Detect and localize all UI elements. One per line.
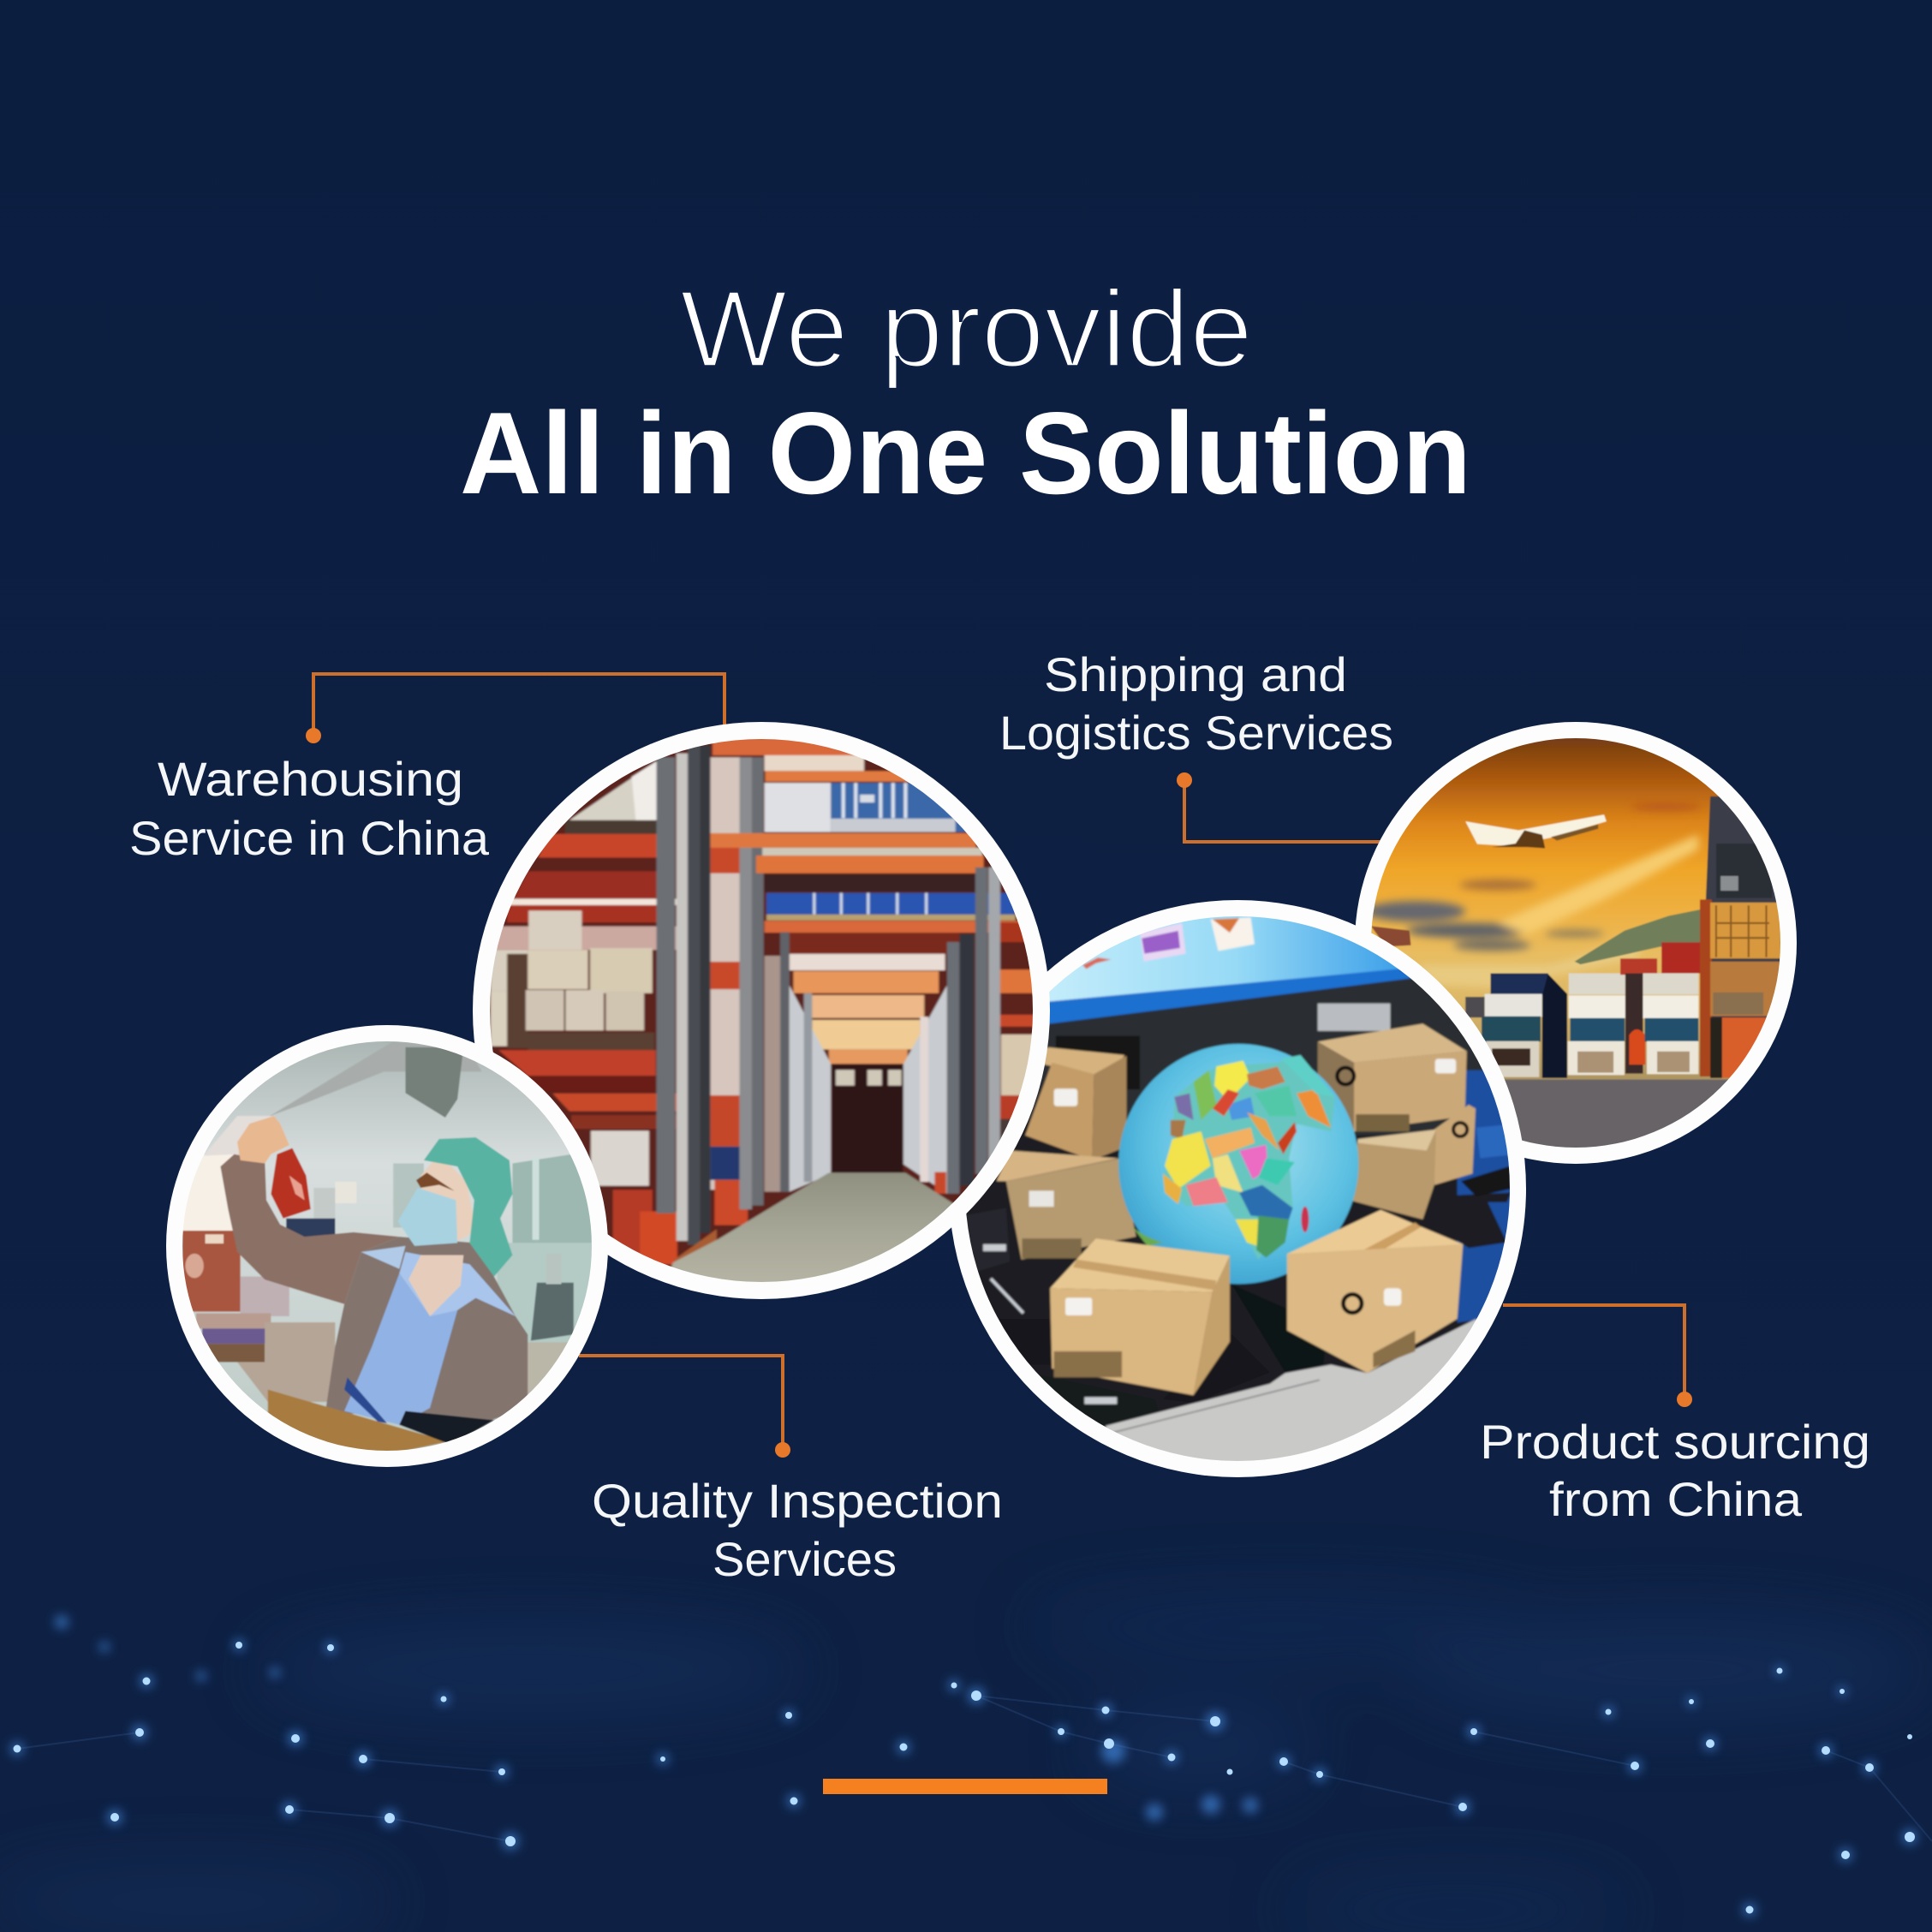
box front left bbox=[1050, 1238, 1230, 1395]
orange accent bar bbox=[823, 1779, 1107, 1794]
red containers bbox=[1620, 942, 1702, 1074]
connector: quality inspection bbox=[579, 1356, 790, 1458]
photo circle: warehouse bbox=[473, 722, 1050, 1299]
label: warehousing service: Service in China bbox=[129, 811, 490, 865]
label: warehousing service bbox=[129, 752, 490, 865]
truck 2 bbox=[1568, 974, 1625, 1075]
container stack bbox=[1700, 796, 1787, 1078]
label: shipping and logistics: Shipping and bbox=[1044, 647, 1347, 701]
window right bbox=[498, 1151, 592, 1347]
body jacket bbox=[220, 1154, 528, 1420]
desktop icons bbox=[1082, 917, 1255, 969]
floor bbox=[660, 1173, 953, 1292]
keyboard bbox=[967, 1209, 1324, 1406]
left racks bbox=[490, 760, 679, 1266]
truck 3 bbox=[1643, 974, 1698, 1074]
label: warehousing service: Warehousing bbox=[158, 752, 463, 806]
hand bbox=[237, 1116, 289, 1163]
photo circle: globe and boxes bbox=[949, 891, 1526, 1479]
left blurred boxes bbox=[182, 1219, 335, 1402]
label: product sourcing: from China bbox=[1549, 1472, 1803, 1526]
label: product sourcing bbox=[1480, 1415, 1870, 1526]
title bbox=[460, 268, 1471, 518]
label: quality inspection: Quality Inspection bbox=[592, 1474, 1003, 1528]
shirt bbox=[344, 1246, 516, 1425]
aisle sides bbox=[765, 868, 1038, 1194]
truck 1 bbox=[1465, 974, 1567, 1078]
globe bbox=[1118, 1044, 1358, 1284]
label: shipping and logistics: Logistics Services bbox=[999, 706, 1393, 760]
title line: We provide: We provide bbox=[680, 268, 1253, 391]
box left middle bbox=[997, 1151, 1136, 1260]
box upper left bbox=[1025, 1047, 1126, 1160]
label: shipping and logistics bbox=[999, 647, 1393, 760]
face bbox=[420, 1154, 476, 1243]
label: quality inspection bbox=[592, 1474, 1003, 1586]
plane bbox=[1459, 814, 1607, 848]
title line: All in One Solution: All in One Solution bbox=[460, 388, 1471, 518]
central aisle top bbox=[711, 738, 1022, 1064]
red bottle bbox=[271, 1148, 311, 1219]
paper bbox=[204, 1116, 274, 1156]
connector: warehousing bbox=[306, 674, 724, 743]
uprights bbox=[657, 746, 764, 1262]
box upper right bbox=[1318, 1023, 1467, 1131]
blue keys bbox=[1458, 1070, 1515, 1322]
hairnet bbox=[424, 1137, 512, 1277]
label: product sourcing: Product sourcing bbox=[1480, 1415, 1870, 1469]
cardboard and tablet bbox=[268, 1390, 494, 1454]
mask bbox=[398, 1188, 457, 1246]
connector: product sourcing bbox=[1503, 1305, 1692, 1407]
box behind right bbox=[1351, 1105, 1476, 1219]
photo circle: shipping bbox=[1355, 722, 1797, 1168]
box front right bbox=[1287, 1210, 1463, 1373]
label: quality inspection: Services bbox=[713, 1532, 897, 1586]
connector: shipping bbox=[1177, 772, 1380, 842]
far door bbox=[832, 1064, 903, 1172]
photo circle: quality inspection bbox=[164, 1025, 608, 1467]
